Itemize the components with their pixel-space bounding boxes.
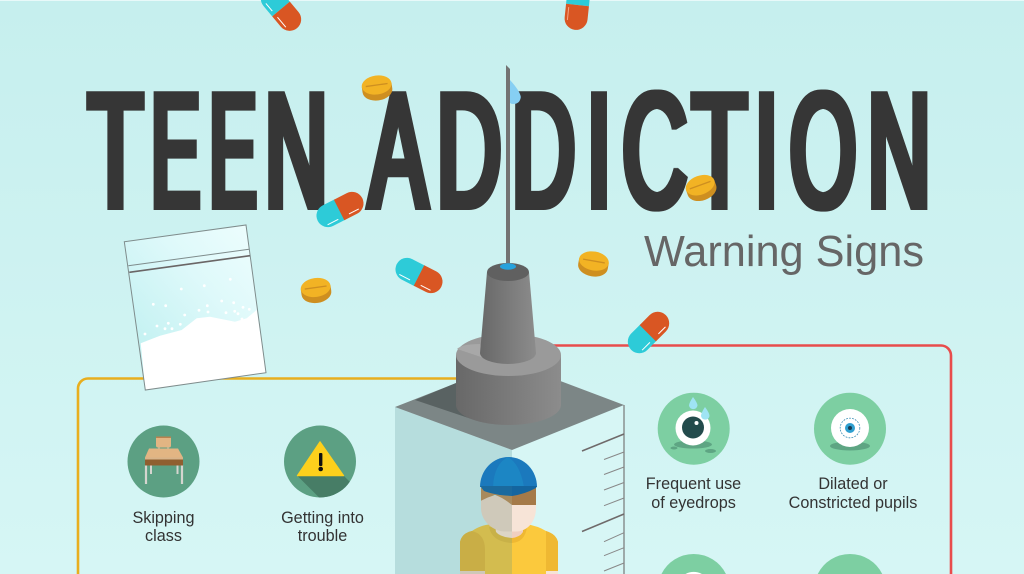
title: E [210,60,256,242]
tablet: right of title [683,171,720,205]
tablet: centre right [576,249,610,279]
title: I [587,60,611,242]
syringe barrel right face [512,405,624,574]
pill: top left [256,0,306,36]
figure: boy with cap [460,457,558,574]
icon: warning triangle [284,426,356,498]
label: skipping class: Skipping [132,509,195,527]
label: getting into trouble: Getting into [281,509,364,527]
boy shirt collar [489,527,512,543]
syringe nozzle cone [480,272,536,364]
boy face [481,496,512,532]
sign: getting into trouble [282,426,364,541]
gold panel border: behaviour signs [78,378,456,574]
label: skipping class: class [145,527,182,545]
label: frequent use of eyedrops: of eyedrops [651,494,736,512]
title: N [868,60,931,242]
label: dilated or constricted pupils: Dilated or [818,475,888,493]
subtitle: Warning Signs [644,227,924,276]
pill: on title [313,188,367,231]
icon: lower right green circle [818,554,882,574]
icon: eye with drops [658,393,730,465]
syringe top plate [395,362,624,450]
pill: right above red border [623,307,674,358]
label: getting into trouble: trouble [298,527,347,545]
sign: frequent use of eyedrops [646,393,741,512]
title: A [369,60,427,242]
icon: eye with dilated pupil [814,393,886,465]
boy cap [480,457,537,487]
title: D [512,60,575,242]
icon: drop on needle [510,80,521,104]
title: D [437,60,501,242]
title: E [151,60,200,242]
icon: plastic bag of powder [124,225,266,390]
title: T [692,60,747,242]
sign: skipping class [128,426,200,545]
syringe collar [456,355,561,425]
syringe barrel left face [395,407,512,574]
syringe [395,65,624,574]
syringe needle [506,65,510,266]
pill: top centre [563,0,592,31]
sign: dilated or constricted pupils [789,393,917,512]
title: C [622,60,687,242]
tablet: top [360,74,394,102]
title: T [88,60,143,242]
label: frequent use of eyedrops: Frequent use [646,475,741,493]
title: O [790,60,856,242]
boy hair [481,488,512,505]
pill: centre [392,254,446,297]
label: dilated or constricted pupils: Constricted pupils [789,494,917,512]
title: I [755,60,778,242]
red panel border: physical signs [553,346,951,574]
icon: school desk [128,426,200,498]
tablet: left [299,276,333,305]
boy neck [495,525,512,538]
title: N [265,60,328,242]
icon: lower left green circle [661,554,726,574]
boy shirt [460,524,512,574]
syringe measurement ticks [582,434,624,571]
